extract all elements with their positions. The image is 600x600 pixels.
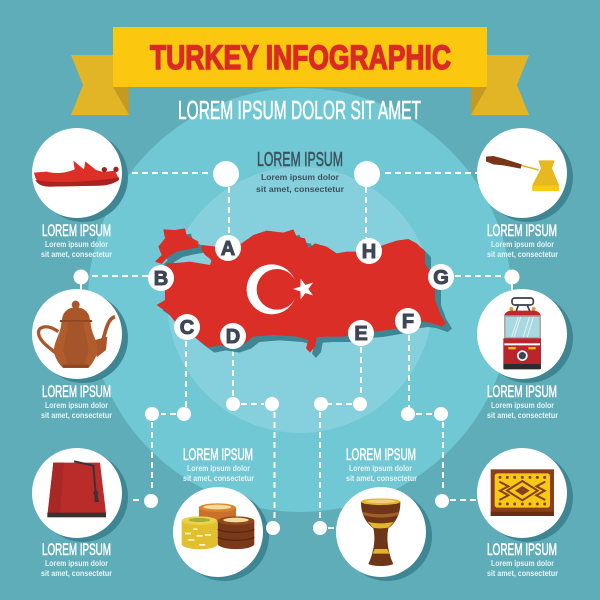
icon circle: carpet <box>477 448 573 542</box>
map markers A to H: H <box>362 241 376 263</box>
label: slipper: sit amet, consectetur <box>41 250 112 259</box>
subtitle: LOREM IPSUM DOLOR SIT AMET <box>178 95 421 125</box>
label: drum: sit amet, consectetur <box>346 474 417 483</box>
label: fez: Lorem ipsum dolor <box>45 559 108 568</box>
label: coffee pot: Lorem ipsum dolor <box>491 240 554 249</box>
icon: darbuka drum <box>361 498 400 566</box>
icon: fez hat <box>47 461 106 517</box>
label: teapot <box>41 382 112 420</box>
map markers A to H: A <box>221 238 235 260</box>
map land <box>155 228 446 353</box>
top centre label: Lorem ipsum dolor <box>261 172 340 182</box>
node beside baklava circle <box>266 521 280 535</box>
label: fez: sit amet, consectetur <box>41 569 112 578</box>
icon circle: slipper <box>32 128 128 222</box>
icon circle: fez <box>32 448 128 542</box>
map markers A to H: C <box>180 317 194 339</box>
map of Turkey with flag <box>155 228 452 358</box>
inner background circle <box>167 167 433 433</box>
connector nodes <box>74 161 520 535</box>
label: tram <box>487 382 558 420</box>
label: teapot: sit amet, consectetur <box>41 411 112 420</box>
label: tram: Lorem ipsum dolor <box>491 401 554 410</box>
label: slipper <box>41 221 112 259</box>
label: carpet: sit amet, consectetur <box>487 569 558 578</box>
icon circle: tram <box>477 289 573 383</box>
label: drum <box>346 445 417 483</box>
label: tram: sit amet, consectetur <box>487 411 558 420</box>
icon: Turkish coffee pot <box>486 156 559 191</box>
top centre label <box>256 149 345 194</box>
icon: patterned carpet <box>491 469 554 516</box>
label: fez: LOREM IPSUM <box>42 540 111 559</box>
top centre label: sit amet, consectetur <box>256 184 345 194</box>
label: drum: LOREM IPSUM <box>346 445 416 464</box>
icon: copper teapot <box>39 301 115 368</box>
label: baklava: sit amet, consectetur <box>183 474 254 483</box>
outer background circle <box>88 88 512 512</box>
dashed connectors <box>81 173 512 528</box>
crescent and star <box>247 264 313 314</box>
map markers A to H: D <box>226 326 240 348</box>
label: carpet: Lorem ipsum dolor <box>491 559 554 568</box>
icon: red slipper <box>34 161 119 187</box>
icon circle: teapot <box>32 289 128 383</box>
label: drum: Lorem ipsum dolor <box>349 464 412 473</box>
map markers A to H: B <box>154 268 168 290</box>
map markers A to H: E <box>354 323 368 345</box>
icon: baklava sweets <box>182 503 254 549</box>
map markers A to H: F <box>402 311 414 333</box>
icon circle: coffee pot <box>477 128 573 222</box>
label: carpet <box>487 540 558 578</box>
label: fez <box>41 540 112 578</box>
icon circle: baklava <box>173 487 269 581</box>
label: teapot: LOREM IPSUM <box>42 382 111 401</box>
label: slipper: Lorem ipsum dolor <box>45 240 108 249</box>
icon circle: drum <box>336 487 432 581</box>
label: baklava <box>183 445 254 483</box>
title banner <box>71 27 529 115</box>
label: coffee pot: sit amet, consectetur <box>487 250 558 259</box>
label: coffee pot <box>487 221 558 259</box>
label: baklava: Lorem ipsum dolor <box>187 464 250 473</box>
map shadow <box>161 234 452 358</box>
label: baklava: LOREM IPSUM <box>183 445 253 464</box>
map markers A to H <box>148 235 454 349</box>
icon: red tram <box>503 298 541 369</box>
top centre label: LOREM IPSUM <box>257 149 343 171</box>
label: teapot: Lorem ipsum dolor <box>45 401 108 410</box>
title: TURKEY INFOGRAPHIC <box>150 39 451 77</box>
label: slipper: LOREM IPSUM <box>42 221 111 240</box>
map markers A to H: G <box>433 267 449 289</box>
